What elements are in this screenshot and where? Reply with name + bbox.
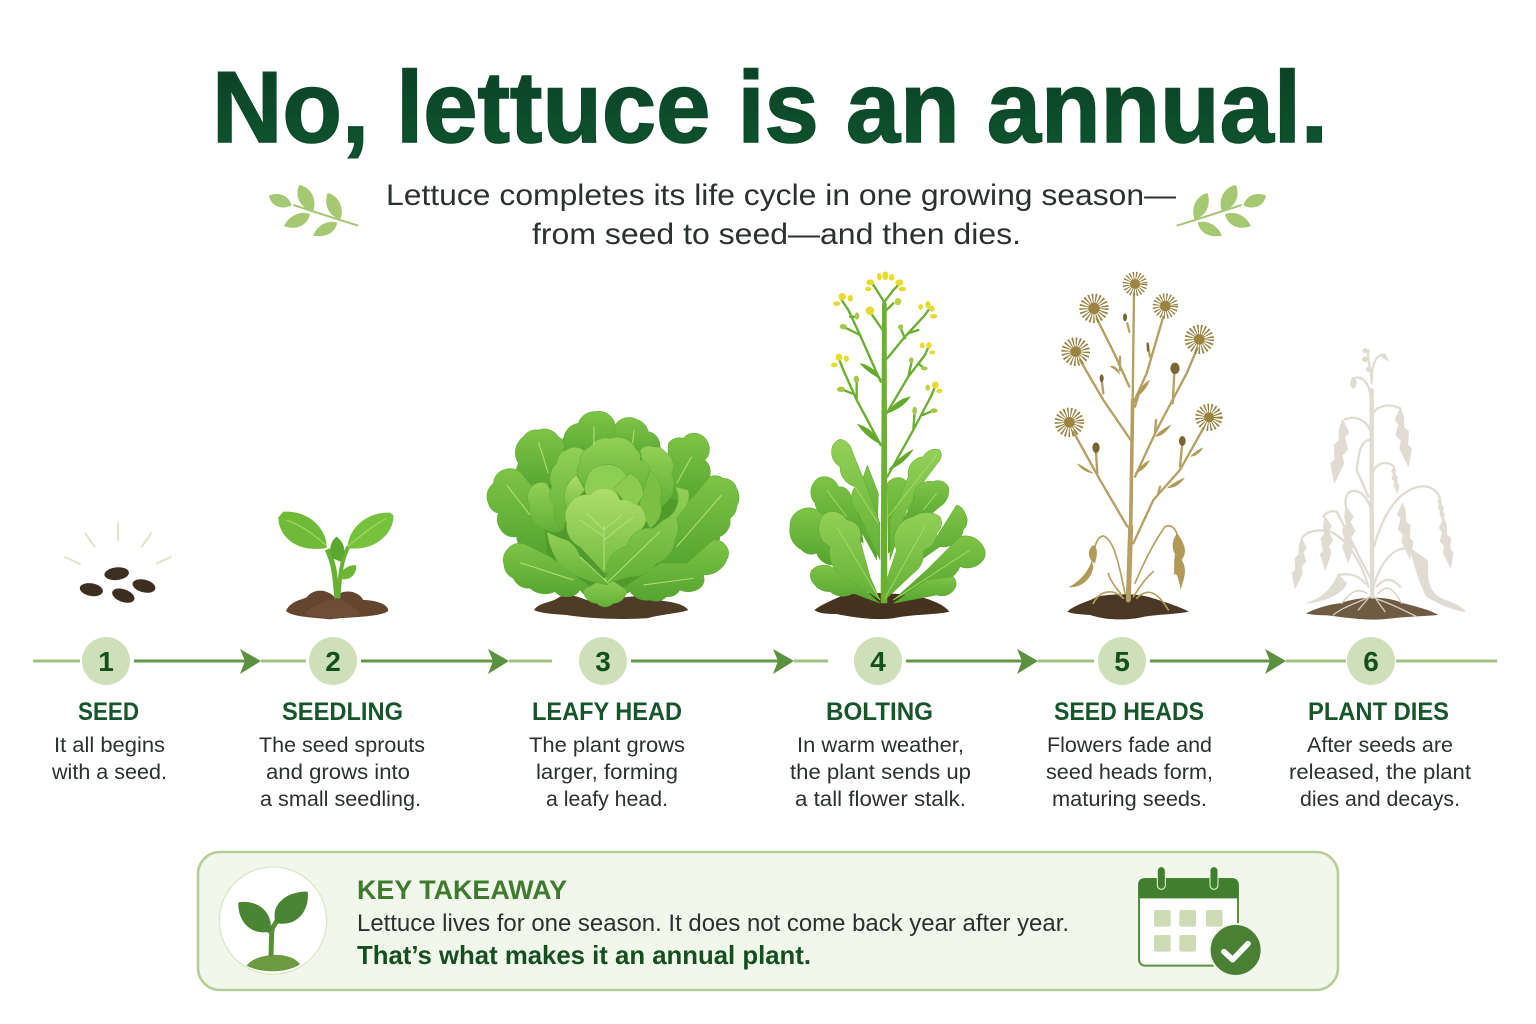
- step text: leafy head: [529, 698, 685, 811]
- step number 4: 4: [870, 646, 886, 677]
- step number 1: 1: [98, 646, 114, 677]
- illustration: bolting plant: [790, 271, 985, 619]
- takeaway text: KEY TAKEAWAY: [357, 875, 567, 905]
- illustration: seed heads plant: [1061, 277, 1217, 619]
- step text: plant dies: [1289, 698, 1471, 811]
- takeaway text: That’s what makes it an annual plant.: [357, 940, 811, 970]
- soil: [814, 593, 949, 619]
- step text: bolting: a tall flower stalk.: [795, 788, 966, 811]
- step text: bolting: BOLTING: [826, 698, 933, 726]
- step text: plant dies: After seeds are: [1307, 734, 1453, 757]
- illustration: leafy head lettuce: [487, 411, 739, 619]
- step number 2: [309, 637, 357, 685]
- step text: leafy head: The plant grows: [529, 734, 685, 757]
- step number 3: [579, 637, 627, 685]
- step text: seedling: SEEDLING: [282, 698, 403, 726]
- panel: key takeaway: [198, 852, 1338, 990]
- step number 2: 2: [325, 646, 341, 677]
- step text: seed heads: SEED HEADS: [1054, 698, 1204, 726]
- step number 5: 5: [1114, 646, 1130, 677]
- illustration: seedling: [278, 512, 393, 619]
- step number 5: [1098, 637, 1146, 685]
- step text: seedling: a small seedling.: [260, 788, 421, 811]
- subtitle: Lettuce completes its life cycle in one growing season—: [386, 179, 1176, 212]
- illustration: dead plant: [1292, 349, 1465, 620]
- takeaway text: [357, 875, 1069, 970]
- step text: bolting: [790, 698, 971, 811]
- step text: leafy head: larger, forming: [536, 761, 678, 784]
- title: No, lettuce is an annual.: [212, 52, 1328, 164]
- step number 3: 3: [595, 646, 611, 677]
- step text: bolting: In warm weather,: [797, 734, 964, 757]
- step text: plant dies: released, the plant: [1289, 761, 1471, 784]
- arrows: [240, 649, 1286, 674]
- main stem: [881, 303, 887, 603]
- illustration: seeds: [64, 523, 172, 606]
- step text: leafy head: LEAFY HEAD: [532, 698, 682, 726]
- step text: plant dies: dies and decays.: [1300, 788, 1460, 811]
- soil: [1306, 598, 1438, 620]
- soil: [1067, 594, 1189, 619]
- step text: bolting: the plant sends up: [790, 761, 971, 784]
- step text: seed: with a seed.: [51, 761, 167, 784]
- step text: seed heads: [1046, 698, 1213, 811]
- step text: seed: It all begins: [54, 734, 165, 757]
- step text: seed heads: maturing seeds.: [1052, 788, 1207, 811]
- step number 1: [82, 637, 130, 685]
- step text: leafy head: a leafy head.: [546, 788, 668, 811]
- step text: seedling: [259, 698, 425, 811]
- timeline: [33, 637, 1497, 685]
- subtitle: from seed to seed—and then dies.: [532, 218, 1021, 251]
- step number 6: 6: [1363, 646, 1379, 677]
- step text: seed: [51, 698, 167, 784]
- icon: right sprig: [1177, 185, 1266, 236]
- takeaway text: Lettuce lives for one season. It does not come back year after year.: [357, 910, 1069, 937]
- icon: sprout: [219, 867, 327, 974]
- step text: seedling: and grows into: [266, 761, 410, 784]
- step text: seedling: The seed sprouts: [259, 734, 425, 757]
- seed heads: [1061, 277, 1217, 431]
- icon: calendar with check: [1138, 867, 1262, 976]
- step text: seed heads: seed heads form,: [1046, 761, 1213, 784]
- step number 6: [1347, 637, 1395, 685]
- step text: seed heads: Flowers fade and: [1047, 734, 1212, 757]
- subtitle: [386, 179, 1176, 251]
- step text: seed: SEED: [78, 698, 139, 726]
- step text: plant dies: PLANT DIES: [1308, 698, 1449, 726]
- soil: [534, 595, 688, 619]
- icon: left sprig: [269, 185, 358, 236]
- step number 4: [854, 637, 902, 685]
